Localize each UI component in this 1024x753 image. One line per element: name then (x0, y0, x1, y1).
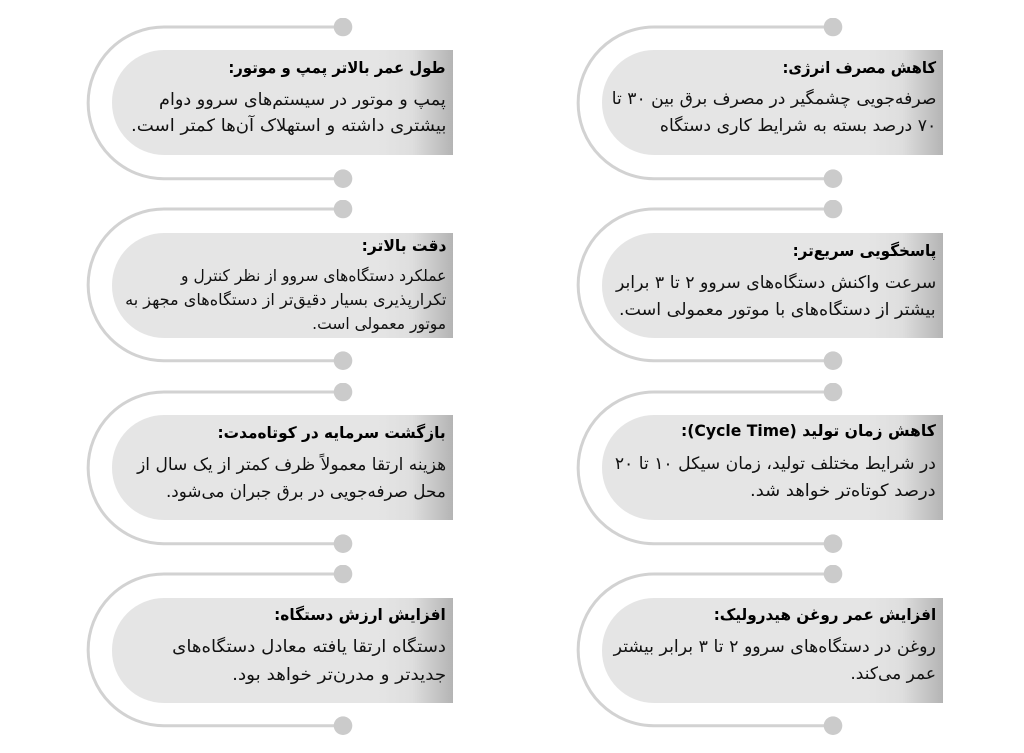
connector arc (576, 18, 842, 188)
panel background (602, 232, 943, 338)
connector arc (576, 383, 842, 553)
body text: جدیدتر و مدرن‌تر خواهد بود. (232, 665, 446, 685)
heading: کاهش مصرف انرژی: (782, 58, 936, 77)
heading: کاهش زمان تولید (Cycle Time): (681, 421, 936, 440)
heading: بازگشت سرمایه در کوتاه‌مدت: (218, 423, 446, 442)
card: cycle time (576, 383, 943, 553)
body text: سرعت واکنش دستگاه‌های سروو ۲ تا ۳ برابر (616, 273, 936, 293)
body text: هزینه ارتقا معمولاً ظرف کمتر از یک سال از (137, 455, 446, 475)
body text: درصد کوتاه‌تر خواهد شد. (750, 481, 936, 501)
card: machine value (86, 565, 453, 735)
body text: پمپ و موتور در سیستم‌های سروو دوام (159, 90, 446, 110)
body text: عملکرد دستگاه‌های سروو از نظر کنترل و (181, 266, 446, 285)
connector arc (576, 565, 842, 735)
body text: صرفه‌جویی چشمگیر در مصرف برق بین ۳۰ تا (611, 89, 936, 109)
body text: در شرایط مختلف تولید، زمان سیکل ۱۰ تا ۲۰ (615, 454, 936, 474)
body text: روغن در دستگاه‌های سروو ۲ تا ۳ برابر بیشتر (614, 637, 936, 657)
connector arc (576, 200, 842, 370)
connector arc (86, 565, 352, 735)
heading: افزایش ارزش دستگاه: (274, 605, 446, 624)
card: energy reduction (576, 18, 943, 188)
heading: دقت بالاتر: (361, 236, 446, 255)
body text: عمر می‌کند. (850, 664, 936, 684)
card: higher accuracy (86, 200, 453, 370)
panel background (112, 232, 453, 338)
body text: موتور معمولی است. (312, 314, 446, 333)
connector arc (86, 18, 352, 188)
card: hydraulic oil life (576, 565, 943, 735)
body text: دستگاه ارتقا یافته معادل دستگاه‌های (172, 637, 446, 657)
panel background (602, 415, 943, 520)
body text: بیشتر از دستگاه‌های با موتور معمولی است. (619, 300, 936, 320)
heading: طول عمر بالاتر پمپ و موتور: (229, 58, 446, 77)
panel background (602, 598, 943, 703)
card: pump and motor life (86, 18, 453, 188)
connector arc (86, 383, 352, 553)
body text: بیشتری داشته و استهلاک آن‌ها کمتر است. (131, 116, 446, 136)
body text: تکرارپذیری بسیار دقیق‌تر از دستگاه‌های مجهز به (125, 290, 446, 309)
card: return on investment (86, 383, 453, 553)
panel background (602, 50, 943, 155)
body text: محل صرفه‌جویی در برق جبران می‌شود. (166, 482, 446, 502)
connector arc (86, 200, 352, 370)
card: faster response (576, 200, 943, 370)
body text: ۷۰ درصد بسته به شرایط کاری دستگاه (660, 116, 936, 136)
panel background (112, 598, 453, 703)
panel background (112, 50, 453, 155)
heading: افزایش عمر روغن هیدرولیک: (714, 605, 936, 624)
heading: پاسخگویی سریع‌تر: (792, 241, 936, 260)
panel background (112, 415, 453, 520)
